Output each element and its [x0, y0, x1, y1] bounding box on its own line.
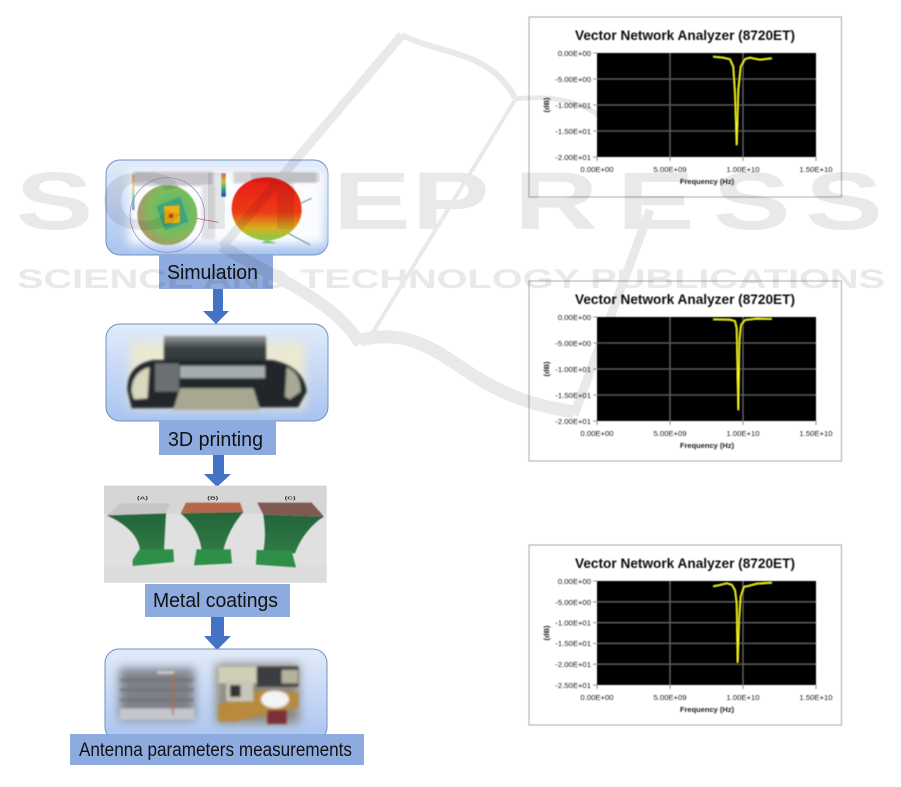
y axis labels: -1.50E+01 — [555, 127, 591, 136]
image: measurement bench — [216, 664, 299, 724]
panel: 3D printing image box — [106, 324, 328, 421]
x axis labels: 0.00E+00 — [580, 165, 614, 174]
y axis labels: -5.00E+00 — [555, 598, 591, 607]
arrow: 3D printing to metal coatings — [204, 455, 231, 487]
panel: measurement image box — [105, 649, 327, 741]
y axis labels: -1.50E+01 — [555, 391, 591, 400]
plot area — [593, 317, 816, 425]
S11 curve — [713, 57, 772, 145]
labels A B C: (A) — [137, 495, 149, 500]
labels A B C — [137, 495, 296, 500]
watermark swoosh — [222, 35, 650, 415]
x axis labels: 0.00E+00 — [580, 429, 614, 438]
x axis labels — [580, 693, 833, 702]
plot area — [593, 581, 816, 689]
image: simulated radiation patterns — [128, 171, 325, 252]
label: Simulation — [159, 255, 273, 289]
chart: vector network analyzer 1 — [529, 17, 842, 197]
x axis labels: 1.00E+10 — [726, 693, 760, 702]
arrow: metal coatings to measurements — [204, 617, 231, 650]
y axis labels: -2.00E+01 — [555, 660, 591, 669]
watermark wordmark: SCITEPRESS — [16, 156, 883, 247]
y axis labels — [555, 577, 591, 690]
y axis labels: -2.50E+01 — [555, 681, 591, 690]
y axis labels: 0.00E+00 — [558, 577, 591, 586]
chart title: Vector Network Analyzer (8720ET) — [575, 555, 795, 571]
S11 curve — [713, 319, 772, 410]
y axis labels — [555, 49, 591, 162]
y axis title: (dB) — [542, 625, 551, 640]
image: 3D printer — [127, 336, 307, 410]
y axis labels: 0.00E+00 — [558, 313, 591, 322]
x axis title: Frequency (Hz) — [680, 177, 735, 186]
watermark tagline: SCIENCE AND TECHNOLOGY PUBLICATIONS — [17, 264, 885, 294]
x axis labels: 5.00E+09 — [653, 693, 687, 702]
x axis labels — [580, 165, 833, 174]
y axis labels: -1.00E+01 — [555, 618, 591, 628]
chart: vector network analyzer 3 — [529, 545, 842, 725]
x axis title: Frequency (Hz) — [680, 705, 735, 714]
y axis labels: -2.00E+01 — [555, 417, 591, 426]
arrow: simulation to 3D printing — [203, 289, 229, 324]
chart: vector network analyzer 2 — [529, 281, 842, 461]
y axis labels: -5.00E+00 — [555, 75, 591, 84]
x axis labels: 0.00E+00 — [580, 693, 614, 702]
y axis labels: -1.50E+01 — [555, 639, 591, 648]
horn A — [107, 503, 174, 566]
label: Simulation: Simulation — [167, 262, 258, 284]
x axis labels: 1.50E+10 — [799, 165, 833, 174]
y axis labels: -5.00E+00 — [555, 339, 591, 348]
plot area — [593, 53, 816, 161]
label: Antenna parameters measurements — [70, 734, 364, 765]
x axis labels: 1.00E+10 — [726, 429, 760, 438]
image: anechoic chamber — [119, 668, 195, 720]
y axis labels: -1.00E+01 — [555, 365, 591, 374]
panel: simulation image box — [106, 160, 328, 255]
x axis labels — [580, 429, 833, 438]
x axis labels: 1.50E+10 — [799, 429, 833, 438]
y axis title: (dB) — [542, 97, 551, 112]
image: metal coated horn antennas — [104, 486, 327, 583]
x axis labels: 1.00E+10 — [726, 165, 760, 174]
label: 3D printing — [159, 421, 276, 455]
y axis labels — [555, 313, 591, 426]
chart title: Vector Network Analyzer (8720ET) — [575, 27, 795, 43]
y axis labels: 0.00E+00 — [558, 49, 591, 58]
label: Antenna parameters measurements: Antenna parameters measurements — [79, 740, 352, 761]
labels A B C: (C) — [285, 495, 296, 500]
horn B — [181, 503, 243, 565]
S11 curve — [713, 583, 772, 663]
y axis title: (dB) — [542, 361, 551, 376]
chart title: Vector Network Analyzer (8720ET) — [575, 291, 795, 307]
label: Metal coatings: Metal coatings — [153, 590, 278, 612]
label: Metal coatings — [145, 584, 290, 617]
x axis title: Frequency (Hz) — [680, 441, 735, 450]
x axis labels: 5.00E+09 — [653, 165, 687, 174]
horn C — [256, 503, 324, 567]
x axis labels: 5.00E+09 — [653, 429, 687, 438]
x axis labels: 1.50E+10 — [799, 693, 833, 702]
watermark: SCITEPRESS logo — [16, 35, 885, 415]
label: 3D printing: 3D printing — [168, 429, 263, 451]
y axis labels: -2.00E+01 — [555, 153, 591, 162]
labels A B C: (B) — [207, 495, 219, 500]
y axis labels: -1.00E+01 — [555, 101, 591, 110]
